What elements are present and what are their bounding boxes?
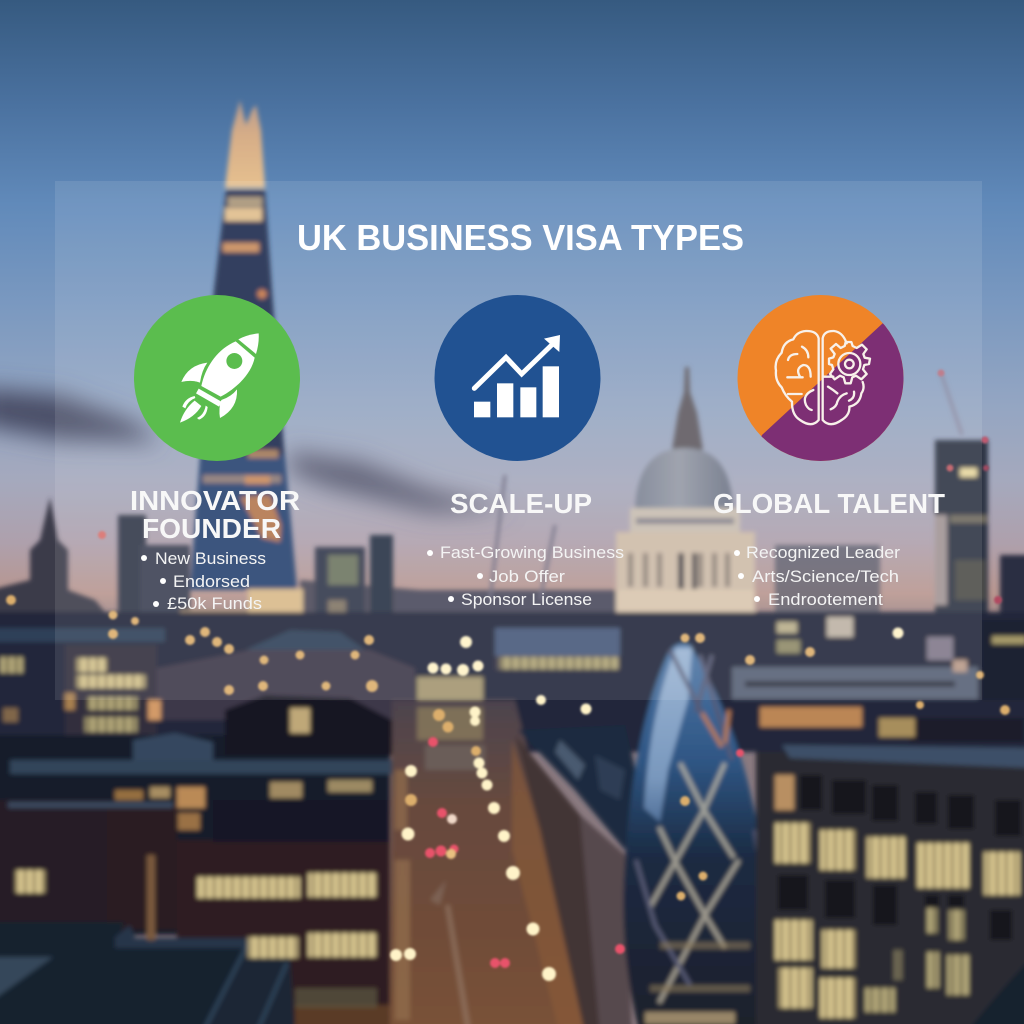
- icon: brain and gear on orange and purple circle: [738, 295, 904, 461]
- right building: [756, 752, 1024, 1024]
- heading: Innovator Founder: INNOVATOR: [130, 485, 300, 516]
- list: Global Talent criteria: Endrootement: [768, 590, 883, 609]
- Gherkin: [623, 643, 766, 1024]
- list: Innovator Founder criteria: Endorsed: [173, 572, 250, 591]
- Shard: [190, 190, 297, 590]
- left windows: [15, 658, 377, 958]
- title: UK BUSINESS VISA TYPES: [297, 217, 744, 258]
- list: Scale-up criteria: [427, 543, 624, 609]
- bokeh lights: [6, 370, 1010, 981]
- list: Innovator Founder criteria: £50k Funds: [167, 594, 262, 613]
- building right of road: [515, 735, 632, 1024]
- heading: Scale-up: SCALE-UP: [450, 488, 592, 519]
- translucent glass panel: [55, 181, 982, 700]
- icon: rocket on green circle: [134, 295, 300, 461]
- column: Global Talent: [713, 290, 945, 609]
- road: [390, 700, 590, 1024]
- list: Scale-up criteria: Fast-Growing Business: [440, 543, 624, 562]
- heading: Innovator Founder: FOUNDER: [142, 513, 281, 544]
- list: Innovator Founder criteria: New Business: [155, 549, 266, 568]
- list: Global Talent criteria: Recognized Leader: [746, 543, 900, 562]
- heading: Global Talent: GLOBAL TALENT: [713, 488, 945, 519]
- right tower: [941, 373, 962, 435]
- heading: Innovator Founder: [130, 485, 300, 544]
- lower-left buildings: [0, 735, 390, 935]
- St Paul's: [672, 367, 703, 450]
- list: Innovator Founder criteria: [141, 549, 266, 613]
- list: Scale-up criteria: Sponsor License: [461, 590, 592, 609]
- icon: growth chart on blue circle: [434, 295, 600, 461]
- column: Scale-up: [427, 295, 624, 609]
- list: Global Talent criteria: [734, 543, 900, 609]
- column: Innovator Founder: [130, 295, 300, 613]
- list: Global Talent criteria: Arts/Science/Tech: [752, 567, 899, 586]
- list: Scale-up criteria: Job Offer: [489, 567, 565, 586]
- far skyline left: [0, 497, 120, 640]
- mid city band: [0, 612, 1024, 752]
